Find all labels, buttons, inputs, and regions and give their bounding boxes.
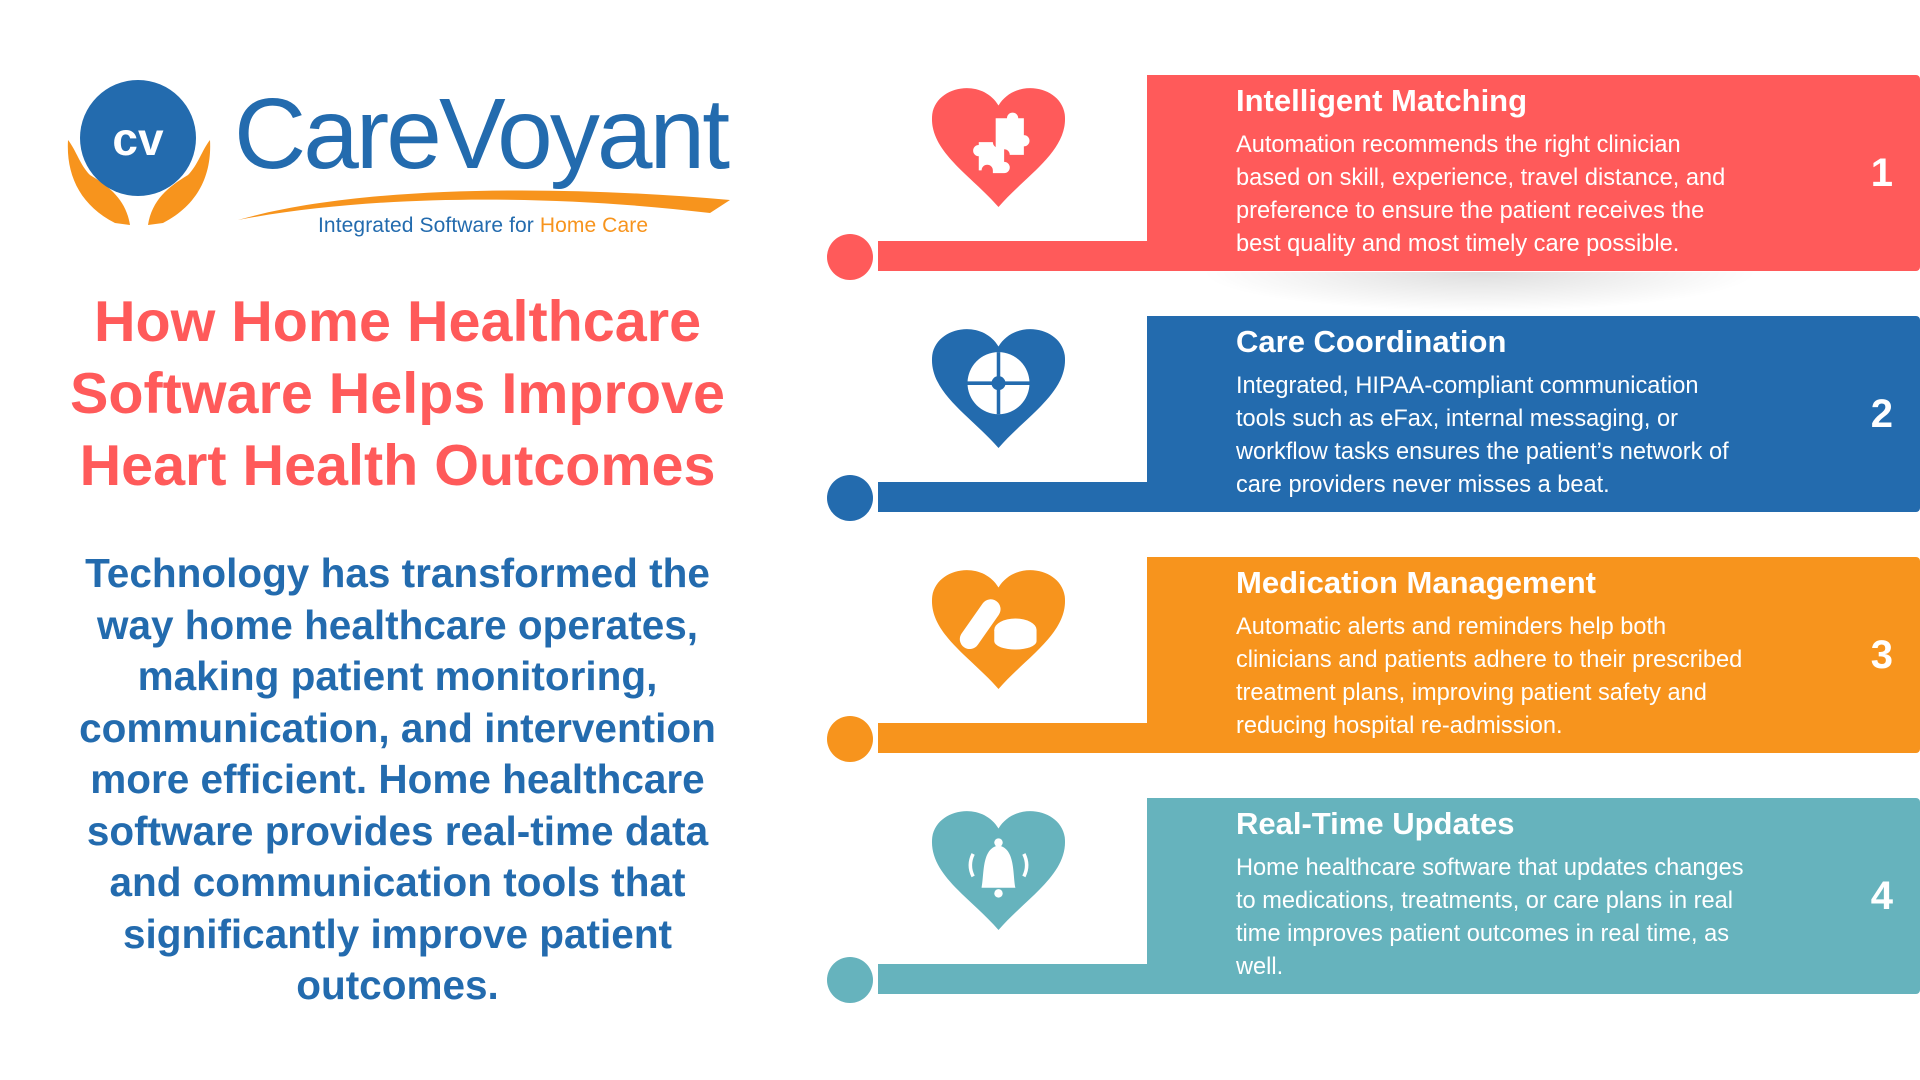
- title: [70, 290, 725, 498]
- card: [1147, 798, 1920, 994]
- intro paragraph: more efficient. Home healthcare: [90, 756, 705, 802]
- icon: hands: [68, 140, 210, 225]
- intro paragraph: communication, and intervention: [79, 704, 716, 750]
- card: preference to ensure the patient receives the: [1236, 198, 1704, 224]
- intro paragraph: way home healthcare operates,: [97, 602, 698, 648]
- card: workflow tasks ensures the patient’s network of: [1236, 439, 1729, 465]
- shadow under card 1: [1200, 272, 1760, 312]
- card: best quality and most timely care possible.: [1236, 231, 1679, 257]
- card: Integrated, HIPAA-compliant communication: [1236, 373, 1698, 399]
- step 2: Care Coordination: [827, 316, 1920, 521]
- card: 2: [1871, 392, 1893, 436]
- intro paragraph: making patient monitoring,: [138, 653, 657, 699]
- logo: Integrated Software for Home Care: [318, 214, 648, 237]
- logo: [68, 78, 730, 237]
- card: based on skill, experience, travel distance, and: [1236, 165, 1725, 191]
- card: Intelligent Matching: [1236, 83, 1527, 118]
- card: clinicians and patients adhere to their prescribed: [1236, 647, 1742, 673]
- connector: [878, 723, 1150, 753]
- card: treatment plans, improving patient safety and: [1236, 680, 1707, 706]
- card: Real-Time Updates: [1236, 806, 1515, 841]
- card: reducing hospital re-admission.: [1236, 713, 1563, 739]
- card: time improves patient outcomes in real time, as: [1236, 921, 1729, 947]
- icon: heart puzzle: [932, 88, 1065, 207]
- card: [1147, 75, 1920, 271]
- title: Software Helps Improve: [70, 362, 725, 426]
- icon: heart bell: [932, 811, 1065, 930]
- card: [1147, 557, 1920, 753]
- intro paragraph: Technology has transformed the: [85, 550, 710, 596]
- connector: [878, 482, 1150, 512]
- connector: [878, 241, 1150, 271]
- connector: [878, 964, 1150, 994]
- intro paragraph: software provides real-time data: [87, 808, 708, 854]
- card: Medication Management: [1236, 565, 1596, 600]
- card: tools such as eFax, internal messaging, or: [1236, 406, 1678, 432]
- card: Automation recommends the right clinician: [1236, 132, 1681, 158]
- card: [1147, 316, 1920, 512]
- card: to medications, treatments, or care plans in real: [1236, 888, 1733, 914]
- card: 3: [1871, 633, 1893, 677]
- intro paragraph: outcomes.: [296, 962, 499, 1008]
- logo: cv: [112, 113, 164, 165]
- card: Care Coordination: [1236, 324, 1506, 359]
- card: Home healthcare software that updates changes: [1236, 855, 1744, 881]
- title: How Home Healthcare: [94, 290, 701, 354]
- icon: heart circle puzzle: [932, 329, 1065, 448]
- icon: cv circle: [80, 80, 196, 196]
- intro paragraph: and communication tools that: [109, 859, 686, 905]
- intro paragraph: [79, 550, 716, 1008]
- intro paragraph: significantly improve patient: [123, 910, 672, 956]
- card: 1: [1871, 151, 1893, 195]
- step 4: Real-Time Updates: [827, 798, 1920, 1003]
- card: care providers never misses a beat.: [1236, 472, 1610, 498]
- icon: heart pills: [932, 570, 1065, 689]
- title: Heart Health Outcomes: [80, 434, 715, 498]
- wordmark: CareVoyant: [234, 78, 730, 190]
- card: well.: [1236, 954, 1283, 980]
- step 1: Intelligent Matching: [827, 75, 1920, 280]
- card: 4: [1871, 874, 1893, 918]
- step 3: Medication Management: [827, 557, 1920, 762]
- card: Automatic alerts and reminders help both: [1236, 614, 1666, 640]
